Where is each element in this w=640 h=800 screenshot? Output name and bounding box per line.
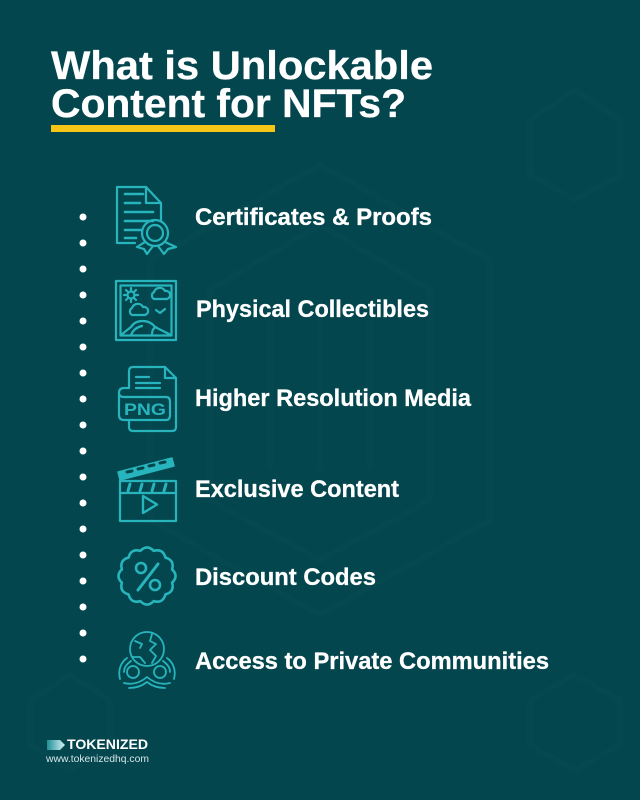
logo: Tokenized: www.tokenizedhq.com — [45, 754, 149, 765]
icon: PNG file — [119, 367, 176, 431]
icon: discount badge — [118, 547, 176, 605]
icon: clapperboard — [118, 458, 176, 521]
label: Higher Resolution Media: Higher Resolution Media — [195, 385, 472, 412]
icon: certificate — [117, 187, 176, 254]
label: Exclusive Content: Exclusive Content — [195, 476, 399, 503]
label: Certificates & Proofs: Certificates & Proofs — [195, 204, 432, 231]
icon: framed landscape — [116, 281, 176, 340]
icon: PNG file: PNG — [124, 400, 166, 419]
icon: globe community — [119, 632, 175, 688]
logo: Tokenized — [45, 737, 149, 765]
label: Physical Collectibles: Physical Collectibles — [196, 296, 429, 323]
dotted timeline — [80, 214, 86, 662]
title underline — [51, 125, 275, 132]
label: Access to Private Communities: Access to Private Communities — [195, 648, 549, 675]
title: What is Unlockable — [51, 44, 433, 88]
logo: Tokenized: TOKENIZED — [67, 737, 148, 752]
label: Discount Codes: Discount Codes — [195, 564, 376, 591]
title: Content for NFTs? — [51, 82, 406, 126]
title — [51, 44, 433, 126]
